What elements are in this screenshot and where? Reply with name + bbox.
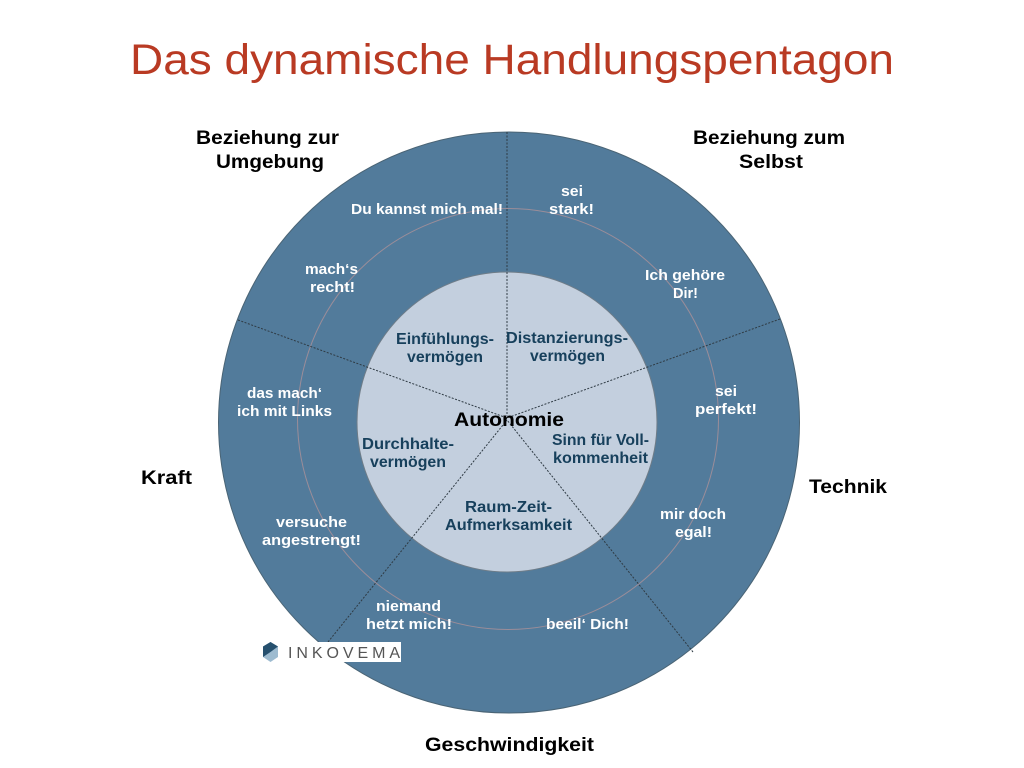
outer labels: competing drivers: ich mit Links xyxy=(237,403,332,420)
outer labels: competing drivers: sei xyxy=(561,183,583,200)
inner labels: abilities: Einfühlungs- xyxy=(396,331,494,348)
outer labels: competing drivers: sei xyxy=(715,383,737,400)
outer labels: competing drivers: Dir! xyxy=(673,285,698,302)
outer labels: competing drivers: mach‘s xyxy=(305,261,358,278)
sector divider lines xyxy=(238,132,780,652)
category labels xyxy=(141,128,887,756)
logo: INKOVEMA xyxy=(263,642,401,662)
outer labels: competing drivers: beeil‘ Dich! xyxy=(546,616,629,633)
category labels: Umgebung xyxy=(216,152,324,173)
outer labels: competing drivers: versuche xyxy=(276,514,347,531)
outer labels: competing drivers: mir doch xyxy=(660,506,726,523)
inner labels: abilities: vermögen xyxy=(370,454,446,471)
outer labels: competing drivers: das mach‘ xyxy=(247,385,322,402)
outer ring xyxy=(218,132,800,713)
inner labels: abilities: Durchhalte- xyxy=(362,436,454,453)
category labels: Geschwindigkeit xyxy=(425,735,595,756)
outer labels: competing drivers: perfekt! xyxy=(695,401,757,418)
logo: INKOVEMA: INKOVEMA xyxy=(288,645,400,662)
outer labels: competing drivers: niemand xyxy=(376,598,441,615)
title: Das dynamische Handlungspentagon xyxy=(130,36,894,84)
outer labels: competing drivers: hetzt mich! xyxy=(366,616,452,633)
inner labels: abilities: vermögen xyxy=(407,349,483,366)
middle ring line xyxy=(298,208,718,630)
inner labels: abilities: Aufmerksamkeit xyxy=(445,517,572,534)
inner labels: abilities: Distanzierungs- xyxy=(506,330,628,347)
inner circle xyxy=(357,272,657,572)
outer labels: competing drivers: stark! xyxy=(549,201,594,218)
inner labels: abilities: Raum-Zeit- xyxy=(465,499,552,516)
category labels: Selbst xyxy=(739,152,804,173)
category labels: Kraft xyxy=(141,468,193,489)
outer labels: competing drivers: Ich gehöre xyxy=(645,267,725,284)
category labels: Beziehung zum xyxy=(693,128,845,149)
category labels: Beziehung zur xyxy=(196,128,340,149)
inner labels: abilities: kommenheit xyxy=(553,450,648,467)
outer labels: competing drivers: angestrengt! xyxy=(262,532,361,549)
outer labels: competing drivers: recht! xyxy=(310,279,355,296)
category labels: Technik xyxy=(809,477,887,498)
center label: Autonomie xyxy=(454,410,564,431)
outer labels: competing drivers xyxy=(237,183,757,633)
inner labels: abilities: vermögen xyxy=(530,348,605,365)
inner labels: abilities xyxy=(362,330,649,534)
outer labels: competing drivers: egal! xyxy=(675,524,712,541)
outer labels: competing drivers: Du kannst mich mal! xyxy=(351,201,503,218)
inner labels: abilities: Sinn für Voll- xyxy=(552,432,649,449)
